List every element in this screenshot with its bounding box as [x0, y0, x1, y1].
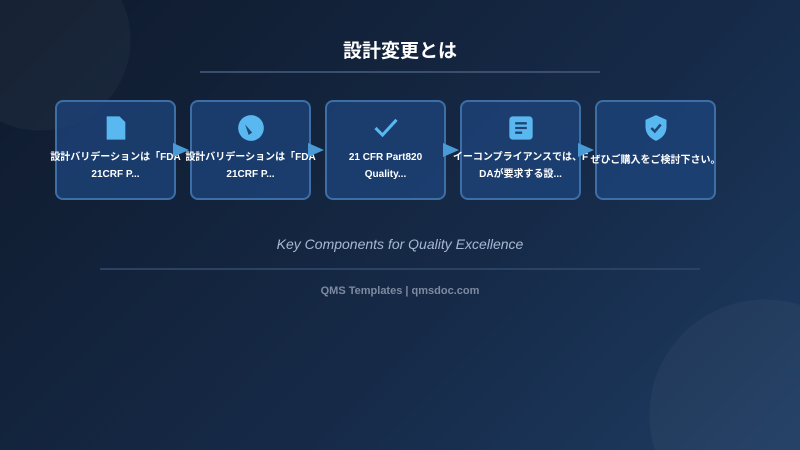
text 2: 21CRF P...: [226, 169, 275, 180]
title: 設計変更とは: [343, 41, 457, 62]
text 1: [50, 150, 181, 180]
arrow 4: [578, 143, 594, 157]
text 4: イーコンプライアンスでは、F: [453, 152, 588, 163]
text 3: [349, 152, 422, 180]
subtitle: Key Components for Quality Excellence: [277, 236, 523, 252]
text 1: 設計バリデーションは「FDA: [50, 152, 181, 163]
text 1: 21CRF P...: [91, 169, 140, 180]
arrow 1: [173, 143, 189, 157]
icon: shield: [646, 115, 666, 141]
icon: circle: [238, 115, 264, 141]
card 2: [190, 100, 311, 200]
text 2: [185, 150, 316, 180]
text 3: Quality...: [365, 169, 406, 180]
text 4: [453, 151, 588, 180]
text 4: DAが要求する設...: [479, 169, 562, 180]
card 3: [325, 100, 446, 200]
text 2: 設計バリデーションは「FDA: [185, 152, 316, 163]
text 3: 21 CFR Part820: [349, 152, 422, 163]
card 1: [55, 100, 176, 200]
card 5: [595, 100, 716, 200]
icon: check: [374, 118, 398, 138]
arrow 2: [308, 143, 324, 157]
card 4: [460, 100, 581, 200]
icon: document: [106, 116, 126, 140]
text 5: ぜひご購入をご検討下さい。: [590, 155, 720, 166]
arrow 3: [443, 143, 459, 157]
icon: list document: [509, 116, 533, 140]
footer: QMS Templates | qmsdoc.com: [321, 285, 479, 297]
